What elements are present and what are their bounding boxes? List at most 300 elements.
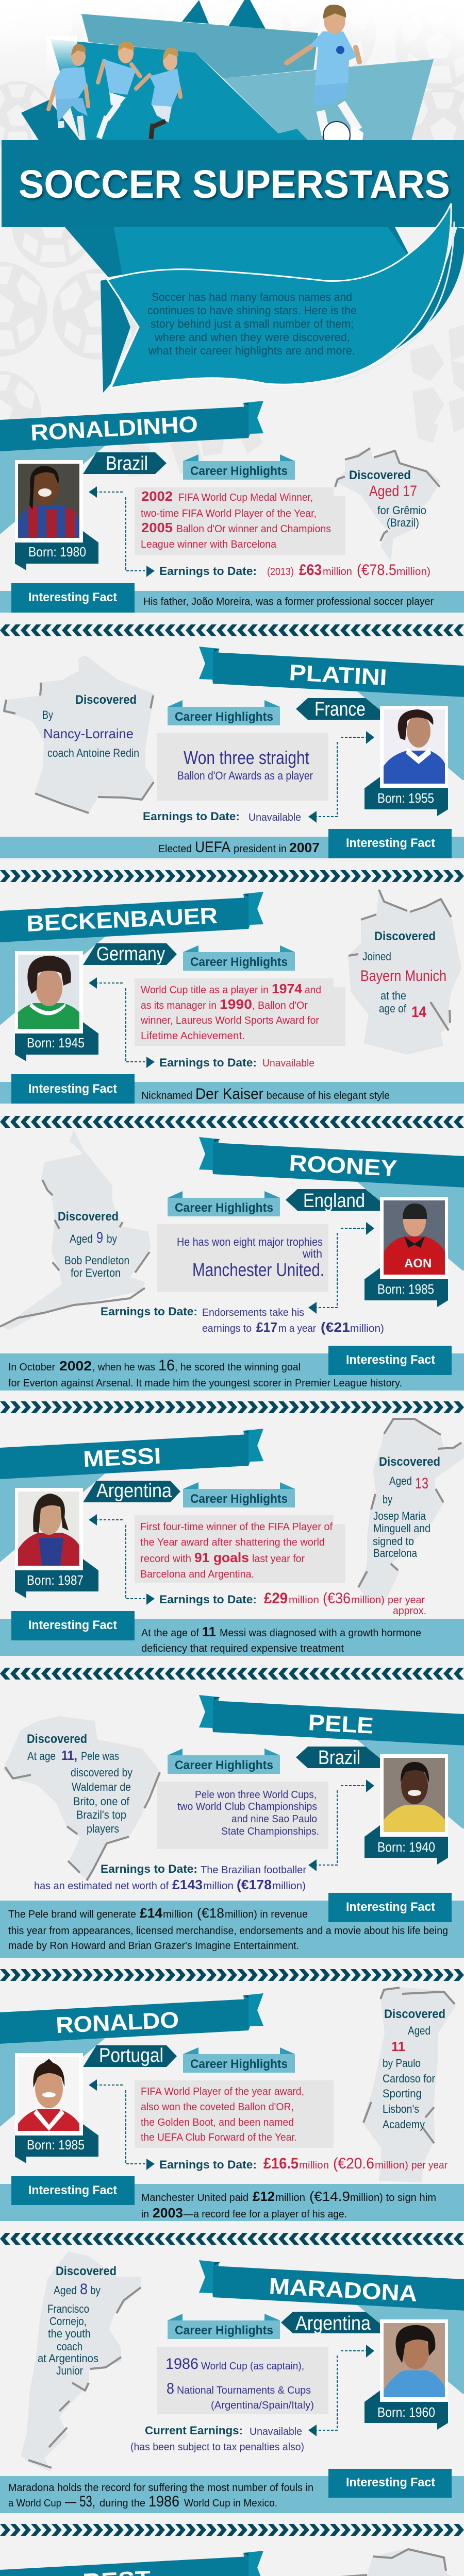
discovered text: Brito, one of — [73, 1795, 130, 1808]
career highlights text: also won the coveted Ballon d'OR, — [141, 2102, 294, 2113]
interesting fact: Interesting Fact — [28, 590, 117, 604]
interesting fact — [0, 1074, 464, 1104]
career highlights text: 2005 — [141, 520, 173, 535]
discovered text: Sporting — [383, 2087, 422, 2100]
name banner — [0, 2551, 263, 2576]
interesting fact — [0, 583, 464, 613]
discovered text — [58, 1210, 129, 1279]
career highlights text: last year for — [252, 1553, 305, 1565]
earnings: £16.5 — [263, 2155, 299, 2172]
discovered text: At age — [27, 1750, 56, 1762]
earnings: per year — [411, 2160, 448, 2171]
discovered text: By — [42, 708, 53, 721]
earnings: Unavailable — [262, 1058, 314, 1069]
interesting fact: this year from appearances, licensed merchandise, endorsements and a movie about his life being — [8, 1925, 448, 1937]
earnings — [143, 810, 301, 823]
earnings: million — [289, 1595, 319, 1606]
discovered text: the youth — [48, 2327, 91, 2340]
intro text: where and when they were discovered, — [154, 331, 350, 344]
player card: Career Highlights — [190, 2057, 288, 2071]
interesting fact: because of his elegant style — [267, 1090, 390, 1101]
earnings: earnings to — [202, 1323, 252, 1334]
career highlights text: the Year award after shattering the world — [140, 1537, 325, 1548]
discovered text: Discovered — [58, 1210, 119, 1224]
earnings — [130, 2424, 304, 2453]
career highlights text — [140, 981, 321, 1042]
career highlights text — [141, 2086, 304, 2143]
interesting fact: Manchester United paid — [141, 2192, 248, 2204]
map: Northern Ireland — [284, 2548, 464, 2576]
player card: France — [314, 699, 366, 720]
player card: Argentina — [295, 2313, 371, 2334]
panel: Pele — [0, 1695, 464, 1958]
earnings: Earnings to Date: — [143, 810, 240, 823]
interesting fact: 1986 — [148, 2493, 179, 2510]
discovered text — [27, 1732, 132, 1835]
earnings: Unavailable — [250, 2426, 302, 2437]
player card: Born: 1940 — [377, 1839, 435, 1855]
player card: Brazil — [318, 1747, 360, 1769]
map: Brazil — [335, 447, 441, 561]
discovered text: 11, — [61, 1748, 77, 1763]
career highlights text: First four-time winner of the FIFA Player of — [140, 1521, 333, 1533]
discovered text: at Argentinos — [38, 2352, 98, 2365]
career highlights text: and — [305, 985, 321, 996]
soccer ball background pattern — [0, 0, 464, 477]
map: Portugal — [362, 1987, 456, 2182]
discovered text: Cardoso for — [383, 2072, 435, 2085]
kid running 2 — [98, 42, 140, 138]
discovered text: Discovered — [384, 2007, 445, 2021]
earnings — [159, 1056, 314, 1069]
interesting fact: Messi was diagnosed with a growth hormone — [220, 1628, 421, 1639]
earnings: million — [203, 1880, 234, 1892]
earnings: million — [323, 566, 352, 578]
player card: Career Highlights — [175, 710, 273, 724]
interesting fact: —a record fee for a player of his age. — [184, 2209, 347, 2220]
name banner — [0, 401, 263, 534]
career highlights text: 1986 — [165, 2355, 198, 2372]
career highlights text: World Cup (as captain), — [201, 2361, 304, 2372]
interesting fact: made by Ron Howard and Brian Grazer's Imagine Entertainment. — [8, 1940, 299, 1952]
interesting fact: 16 — [158, 1357, 175, 1374]
career highlights text: State Championships. — [221, 1826, 319, 1837]
name banner — [199, 2260, 464, 2394]
earnings: Earnings to Date: — [159, 565, 257, 578]
photo: Rooney — [384, 1200, 445, 1275]
discovered text: Discovered — [374, 929, 436, 943]
interesting fact: £14 — [140, 1905, 163, 1921]
earnings: Endorsements take his — [202, 1307, 304, 1318]
name banner: PLATINI — [288, 660, 388, 690]
career highlights text: two-time FIFA World Player of the Year, — [141, 508, 317, 519]
earnings: approx. — [393, 1605, 426, 1617]
intro text: story behind just a small number of them; — [151, 317, 354, 330]
career highlights text: FIFA World Player of the year award, — [141, 2086, 304, 2097]
career highlights text — [165, 2355, 314, 2411]
earnings: million) — [351, 1595, 385, 1606]
earnings: (€36 — [323, 1590, 351, 1607]
discovered text: Josep Maria — [373, 1510, 426, 1522]
interesting fact: for Everton against Arsenal. It made him the youngest scorer in Premier League history. — [8, 1378, 402, 1389]
interesting fact: £12 — [253, 2189, 275, 2204]
career highlights text: 1990 — [220, 996, 252, 1012]
career highlights text: as its manager in — [141, 1000, 217, 1011]
earnings — [159, 1590, 426, 1617]
name banner — [199, 1695, 464, 1828]
discovered text: Discovered — [379, 1455, 440, 1469]
player card: Brazil — [106, 453, 148, 474]
career highlights text: FIFA World Cup Medal Winner, — [178, 492, 313, 503]
intro ribbon — [107, 204, 454, 388]
career highlights text: 2002 — [141, 488, 173, 504]
discovered text — [373, 1455, 440, 1560]
photo: Platini — [384, 709, 445, 784]
interesting fact: , he scored the winning goal — [175, 1362, 301, 1373]
name banner — [0, 1429, 263, 1562]
earnings: Earnings to Date: — [101, 1305, 197, 1318]
discovered text: 11 — [391, 2039, 405, 2054]
player card: Born: 1980 — [28, 544, 86, 560]
interesting fact: Interesting Fact — [346, 1353, 435, 1367]
earnings: (€20.6 — [333, 2155, 374, 2172]
career highlights text — [177, 1235, 324, 1280]
photo: Ronaldinho — [18, 464, 79, 538]
player card: Career Highlights — [175, 1201, 273, 1215]
discovered text — [383, 2007, 445, 2131]
interesting fact: million) to sign him — [350, 2192, 436, 2204]
discovered text: Nancy-Lorraine — [43, 726, 134, 741]
panel: Beckenbauer — [0, 889, 464, 1104]
career highlights text: Ballon d'Or winner and Champions — [176, 523, 331, 535]
career highlights text: the UEFA Club Forward of the Year. — [141, 2132, 297, 2143]
discovered text: 14 — [411, 1004, 426, 1021]
earnings: (€78.5 — [357, 562, 396, 579]
interesting fact: (€18 — [197, 1905, 224, 1921]
interesting fact: deficiency that required expensive treatment — [141, 1643, 344, 1654]
interesting fact: in — [141, 2209, 149, 2220]
discovered text — [349, 468, 426, 529]
discovered text: Discovered — [75, 693, 137, 707]
photo: Ronaldo — [18, 2057, 79, 2131]
discovered text: at the — [380, 989, 406, 1002]
discovered text: Academy — [383, 2118, 425, 2131]
earnings — [159, 562, 430, 579]
interesting fact: during the — [100, 2498, 145, 2509]
discovered text: Discovered — [27, 1732, 87, 1746]
earnings: million — [299, 2160, 329, 2171]
discovered text: 8 — [80, 2281, 88, 2298]
map: France — [3, 655, 155, 813]
interesting fact: Interesting Fact — [346, 836, 435, 850]
discovered text: Pele was — [81, 1750, 119, 1762]
interesting fact: Elected — [158, 843, 192, 855]
photo: Pele — [384, 1758, 445, 1832]
career highlights text — [141, 488, 331, 550]
career highlights text: (Argentina/Spain/Italy) — [211, 2400, 314, 2411]
photo: Messi — [18, 1492, 79, 1566]
career highlights text: winner, Laureus World Sports Award for — [140, 1015, 319, 1026]
interesting fact: His father, João Moreira, was a former professional soccer player — [143, 596, 434, 607]
player card — [15, 452, 345, 577]
player card — [157, 1189, 448, 1314]
career highlights text: 1974 — [272, 981, 303, 996]
earnings: million) — [272, 1880, 306, 1892]
name banner — [0, 892, 263, 1025]
earnings — [159, 2155, 448, 2172]
discovered text — [42, 693, 139, 759]
earnings: per year — [388, 1595, 425, 1606]
interesting fact: million — [275, 2192, 305, 2204]
player card: England — [303, 1190, 365, 1212]
interesting fact: Interesting Fact — [346, 1900, 435, 1914]
discovered text: Cornejo, — [49, 2315, 87, 2328]
earnings: Earnings to Date: — [159, 1056, 257, 1069]
career highlights text: with — [302, 1247, 322, 1260]
map: Brazil — [3, 1716, 160, 1882]
interesting fact — [0, 2469, 464, 2513]
career highlights text: two World Club Championships — [177, 1801, 317, 1812]
header illustration — [21, 0, 434, 148]
player card: Born: 1985 — [377, 1281, 434, 1297]
name banner: RONALDO — [55, 2007, 179, 2038]
discovered text: for Everton — [71, 1266, 121, 1279]
interesting fact: president in — [234, 843, 287, 855]
title band — [2, 140, 464, 227]
intro text: Soccer has had many famous names and — [152, 291, 352, 303]
interesting fact: The Pele brand will generate — [8, 1909, 136, 1920]
career highlights text: , Ballon d'Or — [252, 1000, 308, 1011]
player card: Career Highlights — [190, 464, 288, 478]
discovered text: Joined — [362, 950, 391, 963]
interesting fact: Interesting Fact — [346, 2476, 435, 2489]
player card: Germany — [96, 943, 165, 965]
discovered text: Bayern Munich — [360, 968, 446, 985]
discovered text: Bob Pendleton — [64, 1254, 129, 1267]
discovered text: Aged — [70, 1232, 93, 1245]
discovered text: Lisbon's — [383, 2103, 419, 2115]
earnings — [101, 1305, 384, 1335]
discovered text: Aged — [408, 2024, 430, 2037]
player card: Born: 1960 — [377, 2404, 435, 2420]
interesting fact: 2007 — [289, 840, 320, 855]
interesting fact: Maradona holds the record for suffering the most number of fouls in — [8, 2482, 313, 2494]
earnings: £143 — [172, 1877, 203, 1892]
career highlights text: League winner with Barcelona — [141, 539, 277, 550]
interesting fact: Der Kaiser — [195, 1086, 263, 1103]
career highlights text — [177, 747, 313, 782]
map: Argentina — [21, 2251, 141, 2472]
panel: Ronaldinho — [0, 401, 464, 613]
career highlights text: Pele won three World Cups, — [195, 1789, 317, 1801]
discovered text: Brazil's top — [76, 1808, 126, 1821]
discovered text: 9 — [96, 1229, 103, 1246]
intro text: what their career highlights are and more. — [148, 344, 355, 357]
player card — [15, 1480, 345, 1605]
discovered text: 13 — [415, 1475, 428, 1492]
map: Argentina — [358, 1418, 464, 1603]
panel: Ronaldo — [0, 1987, 464, 2221]
player card — [15, 2045, 334, 2170]
name banner: BECKENBAUER — [26, 903, 218, 937]
interesting fact: 2002 — [59, 1358, 92, 1374]
career highlights text: World Cup title as a player in — [141, 985, 269, 996]
discovered text: discovered by — [71, 1766, 132, 1779]
interesting fact — [0, 1893, 464, 1958]
discovered text: Aged — [389, 1475, 412, 1487]
interesting fact: Interesting Fact — [28, 1618, 117, 1632]
interesting fact: UEFA — [195, 839, 230, 856]
career highlights text: National Tournaments & Cups — [177, 2385, 311, 2396]
player card: Portugal — [99, 2045, 163, 2066]
earnings: (has been subject to tax penalties also) — [130, 2442, 304, 2453]
discovered text: Minguell and — [373, 1522, 430, 1535]
career highlights text: record with — [140, 1553, 191, 1565]
career highlights text: Lifetime Achievement. — [141, 1030, 245, 1042]
interesting fact: — 53, — [65, 2493, 95, 2510]
earnings: Current Earnings: — [145, 2424, 243, 2437]
career highlights text: Won three straight — [184, 747, 309, 768]
interesting fact: (€14.9 — [309, 2189, 350, 2204]
name banner: ROONEY — [288, 1150, 398, 1181]
discovered text: Aged 17 — [369, 483, 417, 500]
panel: Platini — [0, 647, 464, 858]
player card — [157, 2312, 448, 2436]
name banner — [0, 1993, 263, 2127]
earnings: million) — [396, 566, 430, 578]
player card: Career Highlights — [175, 1758, 273, 1772]
interesting fact — [0, 2176, 464, 2221]
discovered text: by — [107, 1232, 117, 1245]
earnings: £17 — [256, 1319, 277, 1335]
interesting fact — [0, 1346, 464, 1391]
player card: Career Highlights — [190, 955, 288, 969]
discovered text: Junior — [56, 2364, 83, 2377]
panel: Maradona — [0, 2251, 464, 2513]
interesting fact: million — [163, 1909, 193, 1920]
player card: Argentina — [96, 1480, 172, 1502]
earnings: million) — [375, 2160, 408, 2171]
interesting fact: World Cup in Mexico. — [184, 2498, 277, 2509]
interesting fact: Interesting Fact — [28, 2183, 117, 2197]
discovered text — [360, 929, 446, 1021]
player card: Born: 1987 — [27, 1572, 84, 1588]
photo: Maradona — [384, 2323, 445, 2397]
interesting fact: million) in revenue — [225, 1909, 308, 1920]
earnings: £29 — [264, 1590, 288, 1607]
kid running 3 — [136, 47, 180, 139]
interesting fact — [0, 829, 464, 858]
intro text: continues to have shining stars. Here is the — [147, 304, 357, 317]
discovered text: Waldemar de — [72, 1781, 131, 1793]
interesting fact: In October — [8, 1362, 55, 1373]
discovered text: players — [87, 1822, 119, 1835]
header shapes — [21, 0, 434, 140]
earnings: Earnings to Date: — [101, 1862, 197, 1875]
photo: Beckenbauer — [18, 955, 79, 1029]
earnings: (€178 — [237, 1877, 272, 1892]
discovered text: by — [90, 2284, 101, 2297]
discovered text: for Grêmio — [377, 504, 426, 517]
interesting fact: 11 — [202, 1624, 216, 1639]
kid kicking ball — [287, 5, 363, 148]
discovered text: coach Antoine Redin — [47, 747, 139, 759]
player card — [157, 698, 448, 823]
earnings: Earnings to Date: — [159, 1593, 257, 1606]
name banner: MESSI — [82, 1443, 161, 1472]
interesting fact — [0, 1611, 464, 1656]
discovered text: signed to — [373, 1535, 414, 1548]
interesting fact: Interesting Fact — [28, 1082, 117, 1096]
player card: Career Highlights — [190, 1492, 288, 1506]
player card: Born: 1985 — [27, 2137, 85, 2153]
map: Germany — [348, 889, 461, 1055]
earnings: (€21 — [321, 1319, 350, 1335]
career highlights text — [140, 1521, 333, 1580]
panel: Best — [0, 2548, 464, 2576]
kid running 1 — [48, 44, 88, 140]
photo: Rooney: AON — [404, 1257, 432, 1270]
earnings — [34, 1862, 306, 1892]
discovered text: (Brazil) — [387, 516, 419, 529]
title: SOCCER SUPERSTARS — [19, 162, 450, 207]
earnings: The Brazilian footballer — [201, 1865, 306, 1876]
earnings: Earnings to Date: — [159, 2158, 257, 2171]
career highlights text: Manchester United. — [192, 1259, 324, 1280]
interesting fact: a World Cup — [8, 2498, 61, 2509]
career highlights text: 8 — [167, 2380, 174, 2397]
name banner — [199, 647, 464, 780]
intro ribbon background — [65, 227, 464, 393]
earnings: has an estimated net worth of — [34, 1880, 169, 1892]
name banner: MARADONA — [268, 2274, 418, 2307]
discovered text: Discovered — [349, 468, 411, 482]
earnings: million) — [350, 1323, 384, 1334]
name banner — [199, 1137, 464, 1270]
earnings: £63 — [299, 562, 322, 579]
career highlights text: 91 goals — [194, 1550, 249, 1565]
earnings: Unavailable — [248, 812, 301, 823]
player card — [157, 1747, 448, 1871]
player card: Career Highlights — [175, 2324, 273, 2337]
panel: Messi — [0, 1418, 464, 1656]
discovered text: by Paulo — [383, 2057, 421, 2070]
earnings: m a year — [278, 1323, 316, 1334]
career highlights text — [177, 1789, 319, 1837]
career highlights text: Barcelona and Argentina. — [140, 1569, 254, 1580]
name banner: RONALDINHO — [30, 412, 198, 446]
panel: Rooney — [0, 1129, 464, 1391]
discovered text: coach — [57, 2340, 82, 2353]
player card: Born: 1945 — [27, 1035, 85, 1050]
career highlights text: and nine Sao Paulo — [231, 1814, 317, 1825]
interesting fact: Nicknamed — [141, 1090, 192, 1101]
career highlights text: the Golden Boot, and been named — [141, 2117, 294, 2128]
discovered text: by — [383, 1493, 392, 1506]
discovered text — [38, 2264, 117, 2377]
discovered text: Barcelona — [373, 1547, 418, 1560]
intro text — [147, 291, 357, 357]
map: England — [0, 1129, 151, 1330]
discovered text: Francisco — [47, 2302, 89, 2315]
interesting fact: At the age of — [141, 1628, 199, 1639]
player card — [15, 943, 345, 1068]
career highlights text: He has won eight major trophies — [177, 1235, 323, 1248]
discovered text: Aged — [54, 2284, 77, 2297]
career highlights text: Ballon d'Or Awards as a player — [177, 769, 313, 782]
interesting fact: 2003 — [153, 2205, 183, 2221]
player card: Born: 1955 — [377, 790, 434, 806]
